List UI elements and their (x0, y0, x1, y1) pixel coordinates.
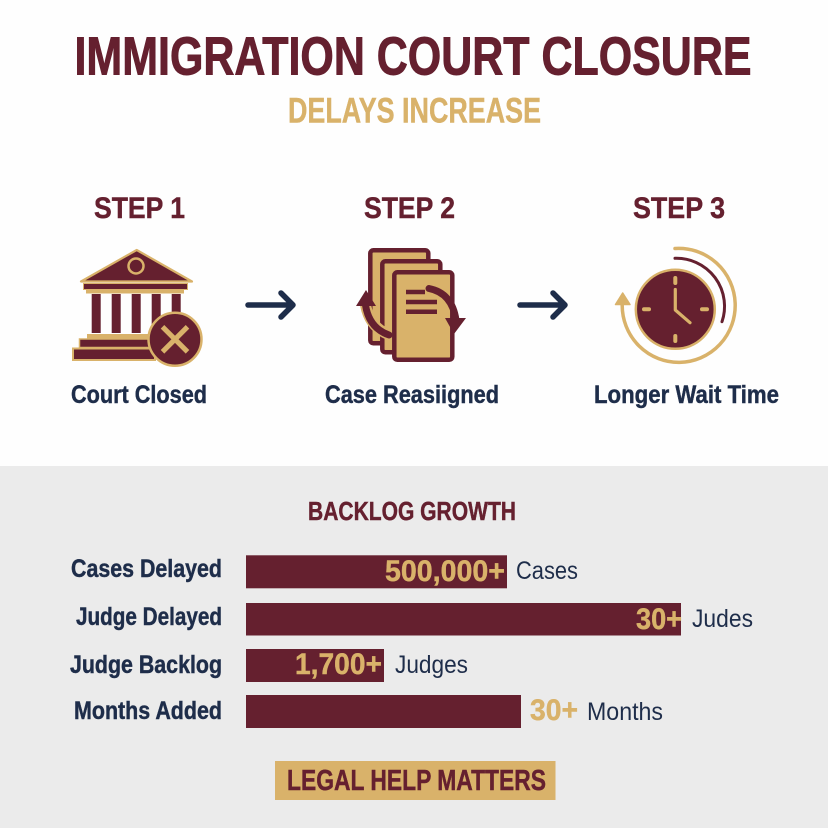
panel: step 1 (71, 192, 207, 409)
arrow: step 1 to step 2 (248, 293, 293, 317)
panel: backlog background (0, 466, 828, 828)
row: judge backlog: Judges (395, 651, 468, 679)
label: court closed: Court Closed (71, 381, 207, 409)
callout: legal help matters (275, 761, 556, 800)
row: cases delayed: Cases Delayed (71, 555, 222, 583)
bar chart: backlog growth (70, 555, 753, 728)
row: months added: Months (587, 698, 663, 726)
panel: step 3 (594, 192, 779, 409)
row: months added: 30+ (530, 694, 578, 727)
row: months added (74, 694, 663, 728)
row: cases delayed (71, 555, 578, 588)
row: judge delayed (76, 603, 753, 636)
icon: reassigned case files (356, 250, 466, 360)
heading: step 2: STEP 2 (364, 192, 455, 225)
row: cases delayed: Cases (516, 557, 578, 585)
row: judge backlog: Judge Backlog (70, 651, 222, 679)
row: judge delayed: Judes (692, 605, 753, 633)
label: case reassigned: Case Reasiigned (325, 381, 499, 409)
heading: backlog growth: BACKLOG GROWTH (308, 496, 516, 526)
row: judge delayed: Judge Delayed (76, 603, 222, 631)
row: judge delayed: 30+ (636, 603, 682, 636)
subtitle: DELAYS INCREASE (288, 92, 541, 130)
row: judge backlog (70, 648, 468, 682)
row: months added: Months Added (74, 697, 222, 725)
panel: step 2 (325, 192, 499, 409)
icon: clock with arrows (616, 248, 735, 362)
heading: step 3: STEP 3 (633, 192, 725, 225)
arrow: step 2 to step 3 (520, 293, 565, 317)
icon: closed courthouse (73, 250, 202, 366)
row: judge backlog: 1,700+ (295, 648, 382, 681)
heading: step 1: STEP 1 (94, 192, 185, 225)
label: longer wait time: Longer Wait Time (594, 381, 779, 409)
callout: legal help matters: LEGAL HELP MATTERS (287, 765, 546, 797)
row: cases delayed: 500,000+ (385, 555, 505, 588)
